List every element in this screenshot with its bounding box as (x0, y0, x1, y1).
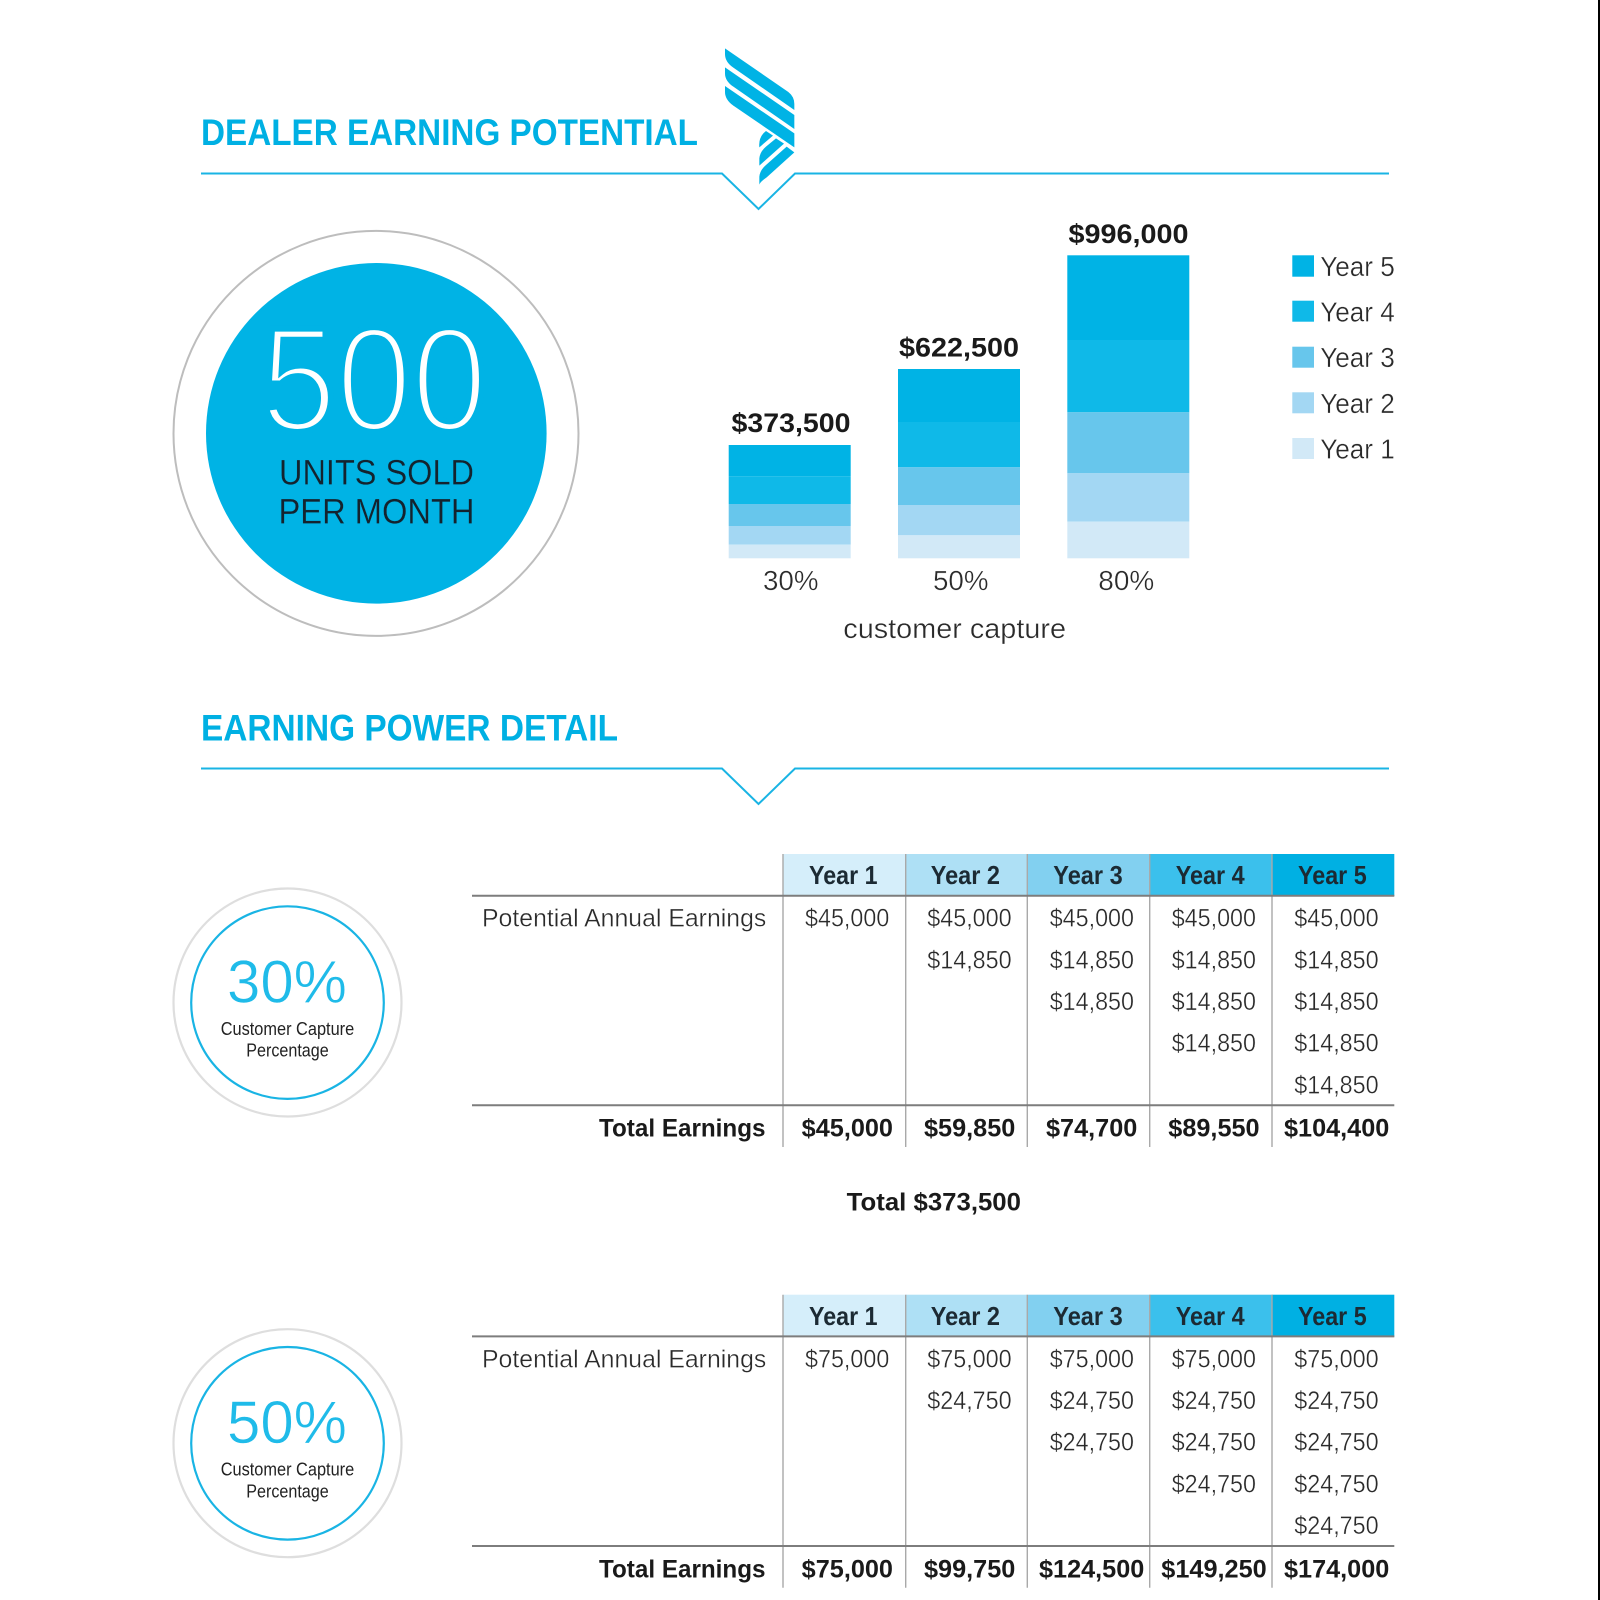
row label: potential annual earnings: Potential Annual Earnings (482, 1345, 766, 1373)
axis label: customer capture: customer capture (843, 613, 1066, 644)
table totals row: $174,000 (1284, 1555, 1389, 1583)
heading rule with notch (201, 174, 1389, 209)
table values: annual earnings: $24,750 (1172, 1429, 1256, 1457)
icon: striped wing logo (725, 48, 794, 185)
table values: annual earnings: $14,850 (927, 946, 1012, 974)
table values: annual earnings: $45,000 (1294, 905, 1379, 933)
table totals row (599, 1115, 1389, 1143)
table values: annual earnings: $24,750 (1294, 1512, 1379, 1540)
badge: 500 units sold per month: PER MONTH (278, 492, 474, 531)
badge: 50 percent customer capture: Percentage (246, 1482, 329, 1502)
legend: years: Year 3 (1320, 342, 1395, 373)
table header: years: Year 2 (931, 1301, 1000, 1331)
table header: years: Year 5 (1298, 1301, 1367, 1331)
table values: annual earnings (805, 905, 1379, 1099)
table values: annual earnings: $14,850 (1294, 988, 1379, 1016)
heading rule with notch (201, 768, 1389, 804)
table totals row: $74,700 (1046, 1115, 1137, 1143)
table values: annual earnings: $24,750 (927, 1387, 1012, 1415)
badge: 50 percent customer capture: Customer Capture (221, 1460, 354, 1480)
table totals row: $149,250 (1161, 1555, 1267, 1583)
heading: dealer earning potential: DEALER EARNING POTENTIAL (201, 111, 698, 153)
table values: annual earnings: $14,850 (1172, 946, 1256, 974)
table totals row: $89,550 (1168, 1115, 1260, 1143)
table totals row: $75,000 (802, 1555, 893, 1583)
badge: 500 units sold per month (174, 231, 578, 636)
table values: annual earnings: $45,000 (805, 905, 889, 933)
badge: 500 units sold per month: 500 (261, 298, 487, 462)
bar: 80 percent: 80% (1098, 565, 1154, 596)
table totals row: Total Earnings (599, 1115, 766, 1143)
table header: years: Year 3 (1053, 860, 1123, 890)
table values: annual earnings: $45,000 (1172, 905, 1256, 933)
table values: annual earnings: $75,000 (1050, 1345, 1134, 1373)
badge: 30 percent customer capture: 30% (227, 948, 347, 1015)
badge: 50 percent customer capture (174, 1329, 402, 1557)
table totals row: $124,500 (1039, 1555, 1144, 1583)
table: 50 percent earnings (472, 1295, 1394, 1588)
badge: 50 percent customer capture: 50% (227, 1389, 347, 1456)
table header: years: Year 4 (1176, 1301, 1245, 1331)
table values: annual earnings: $14,850 (1172, 1030, 1256, 1058)
bar: 50 percent: 50% (933, 565, 988, 596)
table values: annual earnings: $24,750 (1294, 1470, 1379, 1498)
table values: annual earnings: $24,750 (1294, 1387, 1379, 1415)
table values: annual earnings: $75,000 (927, 1345, 1012, 1373)
legend: years: Year 5 (1320, 251, 1395, 282)
table values: annual earnings: $24,750 (1050, 1429, 1134, 1457)
table values: annual earnings: $24,750 (1050, 1387, 1134, 1415)
table values: annual earnings: $24,750 (1294, 1429, 1379, 1457)
table values: annual earnings: $45,000 (927, 905, 1012, 933)
table values: annual earnings: $75,000 (1294, 1345, 1379, 1373)
bar: 80 percent: $996,000 (1068, 219, 1188, 249)
section: earning power detail (201, 706, 1389, 804)
table values: annual earnings: $14,850 (1294, 946, 1379, 974)
bar: 30 percent: $373,500 (732, 408, 850, 438)
bar: 30 percent (729, 408, 851, 596)
section: dealer earning potential (174, 48, 1395, 644)
chart: stacked bars by customer capture (729, 219, 1189, 644)
table totals row: $45,000 (802, 1115, 893, 1143)
table header: years (783, 1295, 1394, 1337)
table values: annual earnings: $14,850 (1294, 1071, 1379, 1099)
table values: annual earnings: $14,850 (1294, 1030, 1379, 1058)
table values: annual earnings: $75,000 (1172, 1345, 1256, 1373)
bar: 50 percent: $622,500 (899, 332, 1019, 362)
legend: years: Year 2 (1320, 388, 1395, 419)
table header: years: Year 1 (809, 1301, 878, 1331)
badge: 30 percent customer capture: Customer Capture (221, 1019, 354, 1039)
table totals row: $99,750 (924, 1555, 1015, 1583)
row label: potential annual earnings: Potential Annual Earnings (482, 905, 766, 933)
heading: earning power detail: EARNING POWER DETAIL (201, 706, 618, 748)
table totals row: Total Earnings (599, 1555, 766, 1583)
badge: 500 units sold per month: UNITS SOLD (279, 453, 474, 492)
grand total: 30 percent: Total $373,500 (847, 1189, 1021, 1217)
table header: years: Year 3 (1053, 1301, 1123, 1331)
table header: years: Year 5 (1298, 860, 1367, 890)
table totals row: $59,850 (924, 1115, 1015, 1143)
table values: annual earnings: $45,000 (1050, 905, 1134, 933)
table values: annual earnings: $14,850 (1050, 946, 1134, 974)
table values: annual earnings: $24,750 (1172, 1470, 1256, 1498)
bar: 50 percent (898, 332, 1020, 596)
table header: years: Year 2 (931, 860, 1000, 890)
badge: 30 percent customer capture: Percentage (246, 1040, 329, 1060)
table values: annual earnings: $24,750 (1172, 1387, 1256, 1415)
table: 30 percent earnings (472, 854, 1394, 1147)
table values: annual earnings: $14,850 (1050, 988, 1134, 1016)
bar: 80 percent (1067, 219, 1189, 596)
table totals row (599, 1555, 1389, 1583)
table header: years: Year 4 (1176, 860, 1245, 890)
table header: years: Year 1 (809, 860, 878, 890)
legend: years: Year 1 (1320, 433, 1395, 464)
table header: years (783, 854, 1394, 896)
table values: annual earnings (805, 1345, 1379, 1540)
legend: years (1292, 251, 1395, 464)
bar: 30 percent: 30% (763, 565, 818, 596)
table totals row: $104,400 (1284, 1115, 1389, 1143)
table values: annual earnings: $75,000 (805, 1345, 889, 1373)
table values: annual earnings: $14,850 (1172, 988, 1256, 1016)
badge: 30 percent customer capture (174, 888, 402, 1116)
legend: years: Year 4 (1320, 297, 1395, 328)
